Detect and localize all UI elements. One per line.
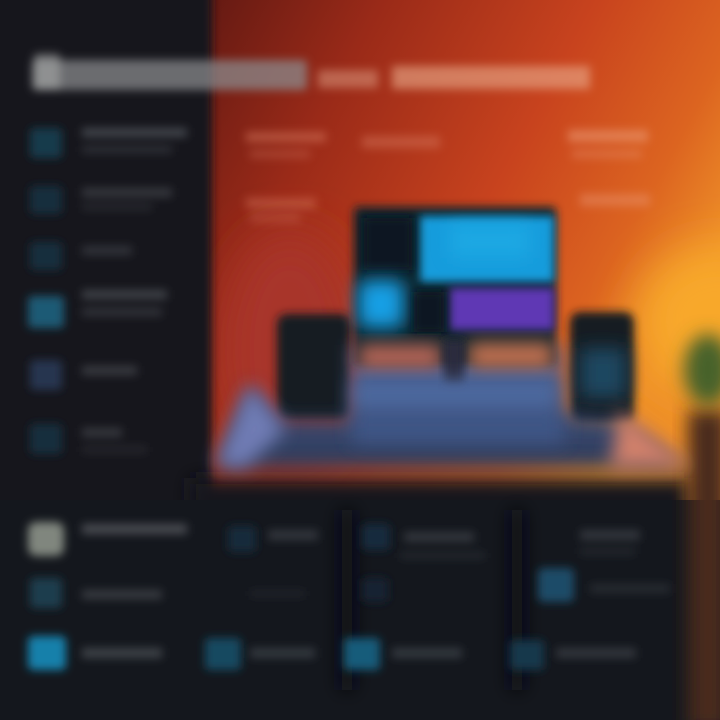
bottom grid labels bbox=[250, 530, 670, 658]
screen: dark center tile bbox=[414, 292, 444, 332]
sidebar panel bbox=[0, 0, 212, 720]
left phone bbox=[277, 314, 351, 420]
sidebar icons bbox=[28, 128, 66, 670]
sidebar labels bbox=[82, 128, 187, 658]
background: orange gradient bbox=[180, 0, 720, 500]
laptop screen bbox=[354, 207, 556, 384]
screen: cyan tile bbox=[358, 280, 404, 328]
screen: purple panel bbox=[450, 288, 554, 330]
keyboard bbox=[352, 380, 564, 444]
right lower background bbox=[688, 410, 720, 720]
laptop base bbox=[215, 345, 690, 468]
bottom grid icons bbox=[205, 524, 574, 670]
bottom dark panel bbox=[190, 478, 690, 720]
title bbox=[32, 54, 590, 90]
screen: salmon bars bbox=[358, 344, 442, 370]
right phone bbox=[570, 312, 634, 424]
top-right labels on orange bbox=[246, 130, 650, 222]
screen: dark tile bbox=[364, 218, 412, 270]
bottom panel dividers bbox=[340, 510, 524, 690]
sidebar list bbox=[28, 128, 187, 670]
background glow bbox=[220, 230, 720, 470]
screen: blue panel bbox=[420, 216, 554, 282]
plant at right edge bbox=[684, 334, 720, 406]
